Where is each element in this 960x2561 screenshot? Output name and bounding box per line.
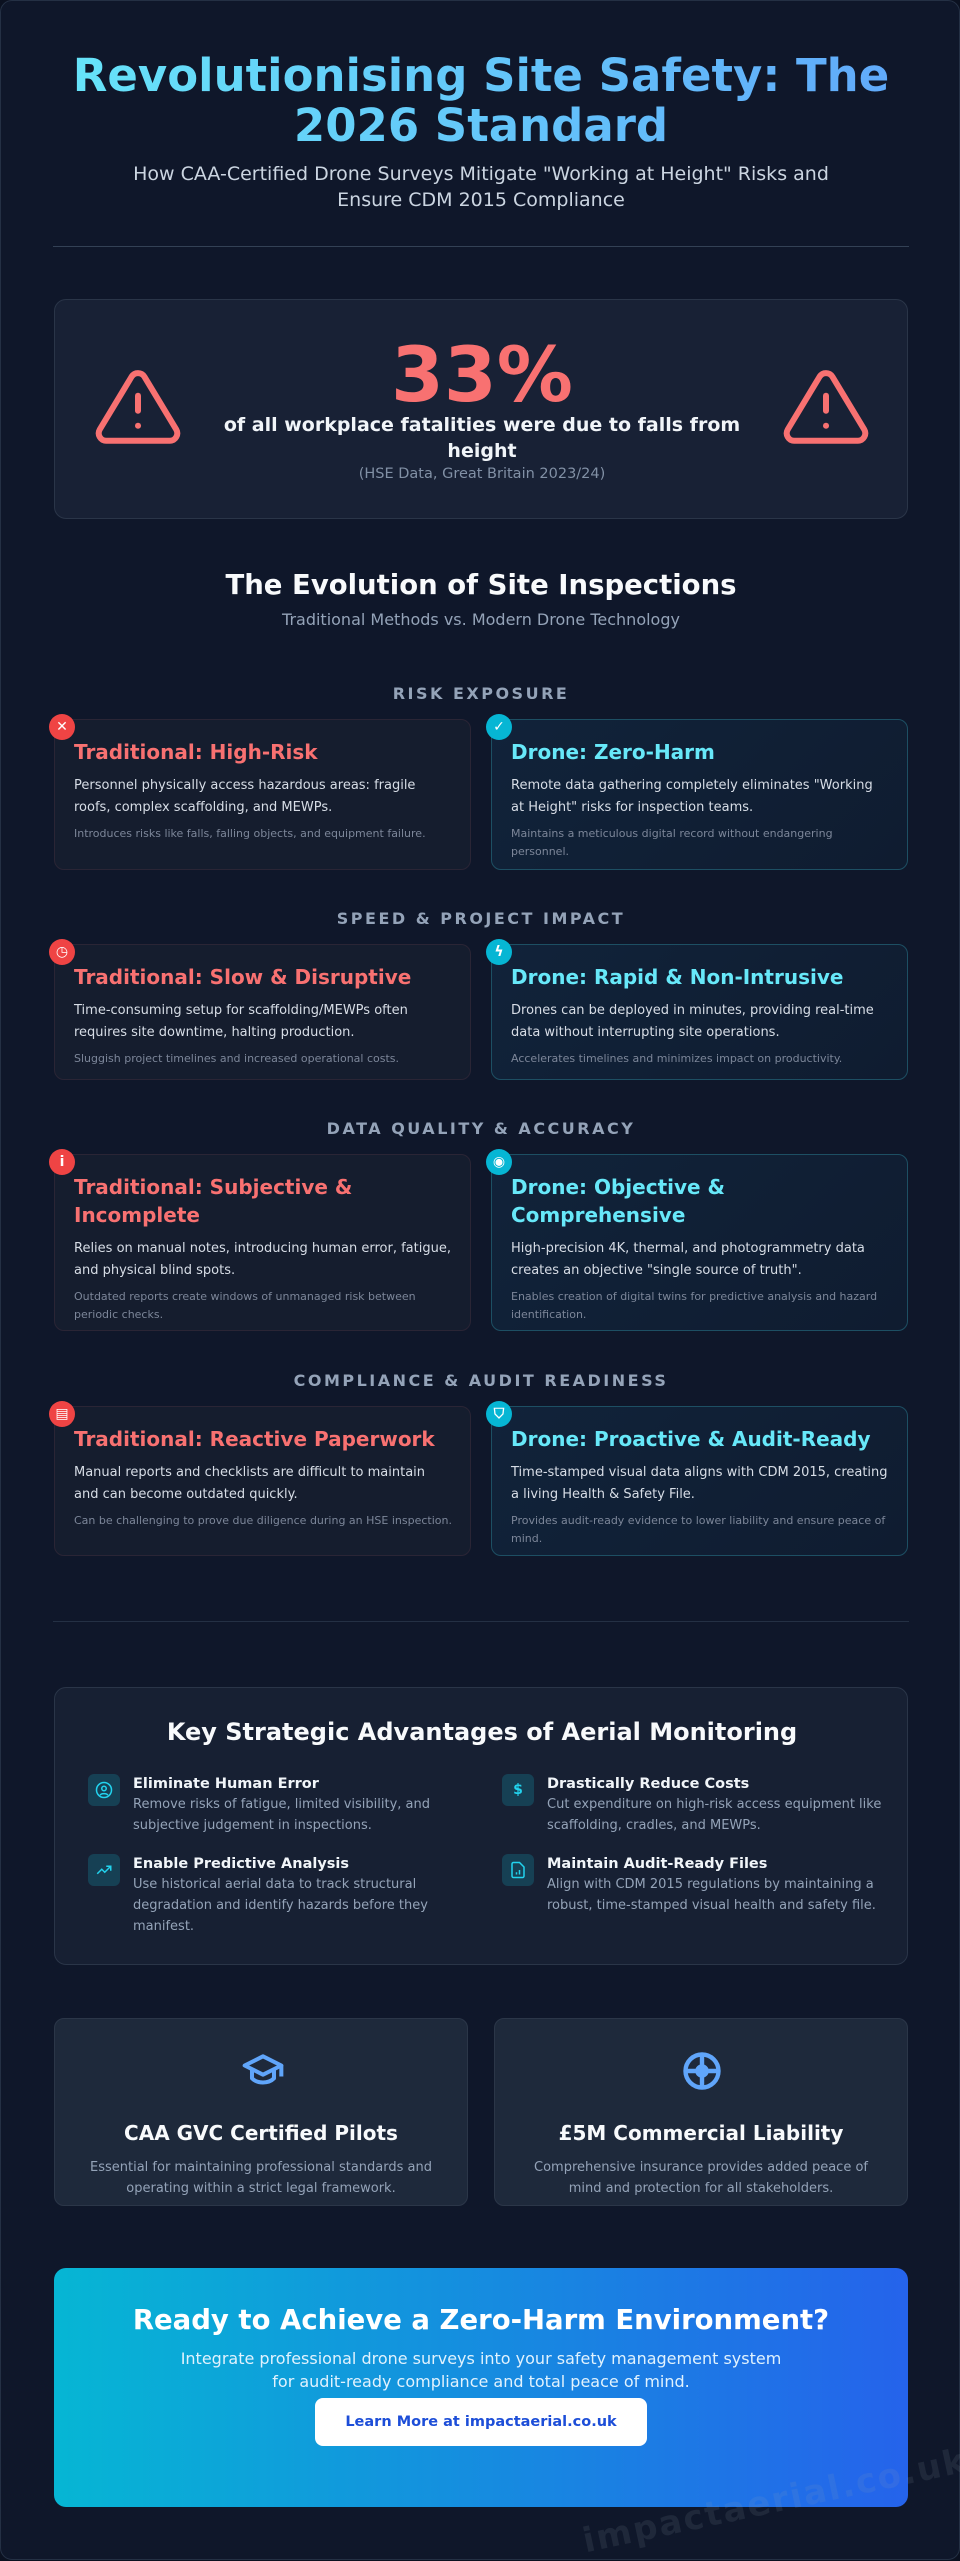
card: drone objective: Enables creation of digital twins for predictive analysis and hazard identification. (511, 1290, 877, 1321)
card: liability: £5M Commercial Liability (559, 2121, 843, 2145)
title: Revolutionising Site Safety: The (73, 49, 889, 102)
card: drone rapid: Drones can be deployed in minutes, providing real-time data without interrupting site operations. (511, 1003, 874, 1040)
card: traditional high-risk: Personnel physically access hazardous areas: fragile roofs, complex scaffolding, and MEWPs. (74, 778, 415, 815)
card: drone zero-harm: ✓ (493, 719, 505, 735)
section label: speed: SPEED & PROJECT IMPACT (337, 909, 625, 928)
panel: statistic (54, 299, 908, 519)
advantage: human error (88, 1774, 430, 1833)
card: CAA pilots (54, 2018, 468, 2206)
card: traditional subjective: i (60, 1154, 64, 1170)
card: traditional high-risk (54, 719, 471, 870)
subtitle: How CAA-Certified Drone Surveys Mitigate "Working at Height" Risks and (133, 163, 829, 185)
card: CAA pilots: Essential for maintaining professional standards and operating within a strict legal framework. (90, 2160, 432, 2196)
heading: Key Strategic Advantages of Aerial Monitoring (167, 1718, 797, 1746)
card: traditional subjective: Outdated reports create windows of unmanaged risk between periodic checks. (74, 1290, 416, 1321)
card: traditional high-risk: Traditional: High-Risk (74, 740, 318, 764)
card: traditional slow (54, 944, 471, 1080)
panel: key advantages (54, 1687, 908, 1965)
advantage: predictive (88, 1854, 428, 1934)
card: traditional slow: Traditional: Slow & Disruptive (74, 965, 411, 989)
heading: evolution: The Evolution of Site Inspections (225, 569, 737, 601)
card: drone proactive: Drone: Proactive & Audit-Ready (511, 1427, 871, 1451)
advantage: predictive: Use historical aerial data to track structural degradation and identify hazards before they manifest. (133, 1877, 428, 1934)
card: drone proactive: ⛉ (494, 1406, 504, 1422)
advantage: predictive: Enable Predictive Analysis (133, 1856, 349, 1872)
card: CAA pilots: CAA GVC Certified Pilots (124, 2121, 398, 2145)
card: traditional high-risk: ✕ (56, 719, 68, 735)
section label: data: DATA QUALITY & ACCURACY (327, 1119, 635, 1138)
card: drone rapid (491, 944, 908, 1080)
cta button (315, 2398, 647, 2446)
title (1, 51, 960, 151)
card: traditional slow: Sluggish project timelines and increased operational costs. (74, 1052, 399, 1065)
subheading: Traditional Methods vs. Modern Drone Technology (282, 610, 680, 629)
card: liability: Comprehensive insurance provides added peace of mind and protection for all stakeholders. (534, 2160, 868, 2196)
stat text: of all workplace fatalities were due to falls from height (224, 414, 740, 462)
cta text: Integrate professional drone surveys into your safety management system (181, 2349, 781, 2368)
card: drone objective: Drone: Objective & Comprehensive (511, 1175, 725, 1227)
icon: shield wheel (683, 2052, 721, 2090)
cta button: Learn More at impactaerial.co.uk (345, 2414, 617, 2430)
card: drone proactive (491, 1406, 908, 1556)
advantage: costs (502, 1774, 881, 1833)
cta text: for audit-ready compliance and total peace of mind. (272, 2372, 690, 2391)
advantage: audit files: Maintain Audit-Ready Files (547, 1856, 767, 1872)
cta text (181, 2349, 781, 2391)
advantage: costs: Drastically Reduce Costs (547, 1776, 749, 1792)
card: drone objective: High-precision 4K, thermal, and photogrammetry data creates an objective "single source of truth". (511, 1241, 865, 1278)
advantage: costs: Cut expenditure on high-risk access equipment like scaffolding, cradles, and MEWPs. (547, 1797, 881, 1833)
card: drone objective (491, 1154, 908, 1331)
card: drone zero-harm: Drone: Zero-Harm (511, 740, 715, 764)
icon: graduation cap (242, 2054, 284, 2084)
card: traditional reactive: Can be challenging to prove due diligence during an HSE inspection. (74, 1514, 452, 1527)
title: 2026 Standard (294, 99, 668, 152)
card: traditional subjective: Relies on manual notes, introducing human error, fatigue, and physical blind spots. (74, 1241, 451, 1278)
advantage: audit files: Align with CDM 2015 regulations by maintaining a robust, time-stamped visual health and safety file. (547, 1877, 876, 1913)
card: drone objective: ◉ (493, 1154, 505, 1170)
card: traditional reactive: ▤ (55, 1406, 69, 1422)
card: drone proactive: Provides audit-ready evidence to lower liability and ensure peace of mind. (511, 1514, 885, 1545)
stat number: 33% (391, 330, 573, 419)
panel: call to action (54, 2268, 908, 2507)
card: traditional slow: Time-consuming setup for scaffolding/MEWPs often requires site downtime, halting production. (74, 1003, 408, 1040)
subtitle (133, 163, 829, 211)
section label: compliance: COMPLIANCE & AUDIT READINESS (294, 1371, 668, 1390)
card: drone proactive: Time-stamped visual data aligns with CDM 2015, creating a living Health & Safety File. (511, 1465, 888, 1502)
card: drone zero-harm (491, 719, 908, 870)
advantage: costs: $ (513, 1782, 523, 1798)
card: liability (494, 2018, 908, 2206)
card: drone rapid: Drone: Rapid & Non-Intrusive (511, 965, 843, 989)
card: traditional reactive: Manual reports and checklists are difficult to maintain and can become outdated quickly. (74, 1465, 425, 1502)
cta heading: Ready to Achieve a Zero-Harm Environment? (133, 2304, 829, 2336)
card: traditional subjective (54, 1154, 471, 1331)
icon: warning right (784, 370, 868, 444)
source: (HSE Data, Great Britain 2023/24) (359, 466, 605, 482)
card: traditional reactive (54, 1406, 471, 1556)
card: drone zero-harm: Remote data gathering completely eliminates "Working at Height" risks for inspection teams. (511, 778, 873, 815)
card: drone rapid: ϟ (494, 944, 504, 960)
card: drone rapid: Accelerates timelines and minimizes impact on productivity. (511, 1052, 842, 1065)
card: traditional subjective: Traditional: Subjective & Incomplete (74, 1175, 352, 1227)
card: drone zero-harm: Maintains a meticulous digital record without endangering personnel. (511, 827, 833, 858)
card: traditional high-risk: Introduces risks like falls, falling objects, and equipment failure. (74, 827, 426, 840)
advantage: audit files (502, 1854, 876, 1913)
card: traditional reactive: Traditional: Reactive Paperwork (74, 1427, 435, 1451)
advantage: human error: Remove risks of fatigue, limited visibility, and subjective judgement in inspections. (133, 1797, 430, 1833)
section label: risk: RISK EXPOSURE (393, 684, 569, 703)
subtitle: Ensure CDM 2015 Compliance (337, 189, 625, 211)
card: traditional slow: ◷ (56, 944, 68, 960)
icon: warning left (96, 370, 180, 444)
advantage: human error: Eliminate Human Error (133, 1776, 319, 1792)
